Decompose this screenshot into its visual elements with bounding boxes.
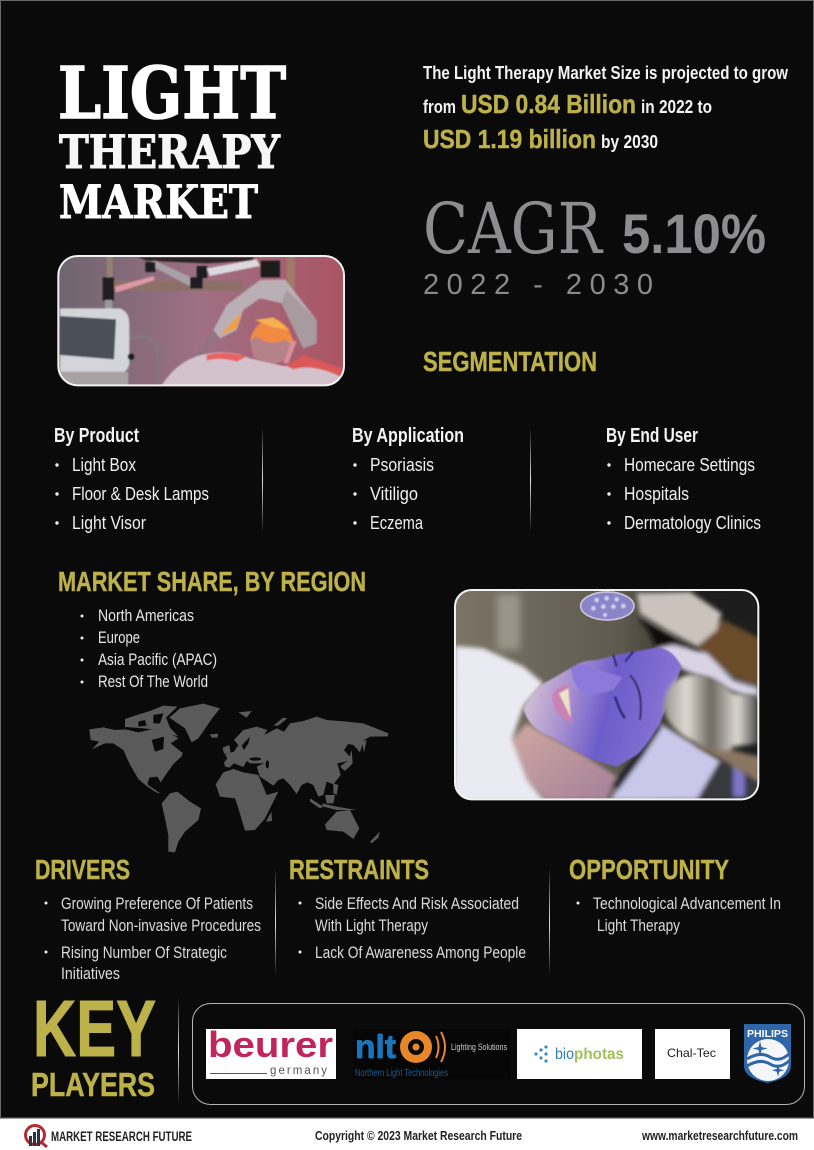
key players panel [192,1004,804,1104]
title: THERAPY [59,125,281,179]
opportunity section: Light Therapy [597,917,681,935]
segment column: by end user: Hospitals [624,484,689,504]
world map [89,704,388,852]
segment column: by product [54,425,209,533]
CAGR figure: 5.10% [622,202,766,265]
driver section: Initiatives [61,965,120,983]
footer: Copyright © 2023 Market Research Future [315,1128,522,1143]
segment column: by product: By Product [54,425,139,447]
region list [80,607,217,691]
heading: key players: KEY [33,984,156,1073]
logo: chal-tec: Chal-Tec [667,1046,716,1060]
restraints section: With Light Therapy [315,917,429,935]
logo: nlt: nlt [355,1028,396,1065]
segment column: by product: Light Visor [72,513,146,533]
segment column: by product: Floor & Desk Lamps [72,484,209,504]
driver section: Toward Non-invasive Procedures [61,917,261,935]
logo: chal-tec [655,1029,730,1079]
opportunity section: OPPORTUNITY [569,854,729,885]
restraints section: Lack Of Awareness Among People [315,944,526,962]
title: MARKET [59,175,258,229]
logo: philips: PHILIPS [747,1028,788,1040]
market size statement: in 2022 to [641,96,712,117]
market size statement: USD 0.84 Billion [461,89,636,119]
opportunity section: Technological Advancement In [593,895,781,913]
segment column: by end user [606,425,761,533]
heading: key players: PLAYERS [31,1066,155,1103]
logo: nlt: Lighting Solutions [451,1042,507,1052]
segment column: by application: By Application [352,425,464,447]
logo: philips [744,1024,791,1083]
segment column: by end user: Dermatology Clinics [624,513,761,533]
logo: nlt [353,1028,511,1079]
market size statement: USD 1.19 billion [423,124,596,154]
driver section: Growing Preference Of Patients [61,895,253,913]
region list: Rest Of The World [98,673,208,691]
heading: market share: MARKET SHARE, BY REGION [58,566,366,597]
heading: key players [31,984,156,1103]
region list: Europe [98,629,140,647]
icon: market research future [26,1126,47,1147]
market size statement: by 2030 [601,131,658,152]
CAGR figure: 2022 - 2030 [423,269,653,301]
photo: blue light therapy [453,590,760,802]
segment column: by end user: Homecare Settings [624,455,755,475]
CAGR figure: CAGR [423,188,604,270]
logo: biophotas: photas [574,1046,624,1063]
logo: beurer: beurer [208,1024,333,1065]
logo: beurer: germany [270,1065,327,1077]
restraints section [289,854,526,962]
title [58,51,286,229]
photo: red light therapy [58,256,344,387]
market size statement [423,62,788,154]
driver section [35,854,261,983]
segment column: by application: Eczema [370,513,424,533]
region list: North Americas [98,607,194,625]
restraints section: Side Effects And Risk Associated [315,895,519,913]
driver section: DRIVERS [35,854,130,885]
footer [0,1117,814,1150]
logo: nlt: Northern Light Technologies [355,1068,448,1079]
segment column: by application: Psoriasis [370,455,434,475]
logo: beurer [206,1024,336,1079]
region list: Asia Pacific (APAC) [98,651,217,669]
CAGR figure [423,188,766,301]
logo: biophotas [517,1029,642,1079]
title: LIGHT [58,51,286,135]
heading: segmentation: SEGMENTATION [423,346,597,377]
driver section: Rising Number Of Strategic [61,944,227,962]
logo: biophotas: bio [555,1046,574,1063]
market size statement: from [423,96,456,117]
segment column: by application [352,425,464,533]
segment column: by application: Vitiligo [370,484,418,504]
footer: MARKET RESEARCH FUTURE [51,1129,192,1144]
segment column: by end user: By End User [606,425,698,447]
segment column: by product: Light Box [72,455,136,475]
opportunity section [569,854,781,935]
restraints section: RESTRAINTS [289,854,429,885]
